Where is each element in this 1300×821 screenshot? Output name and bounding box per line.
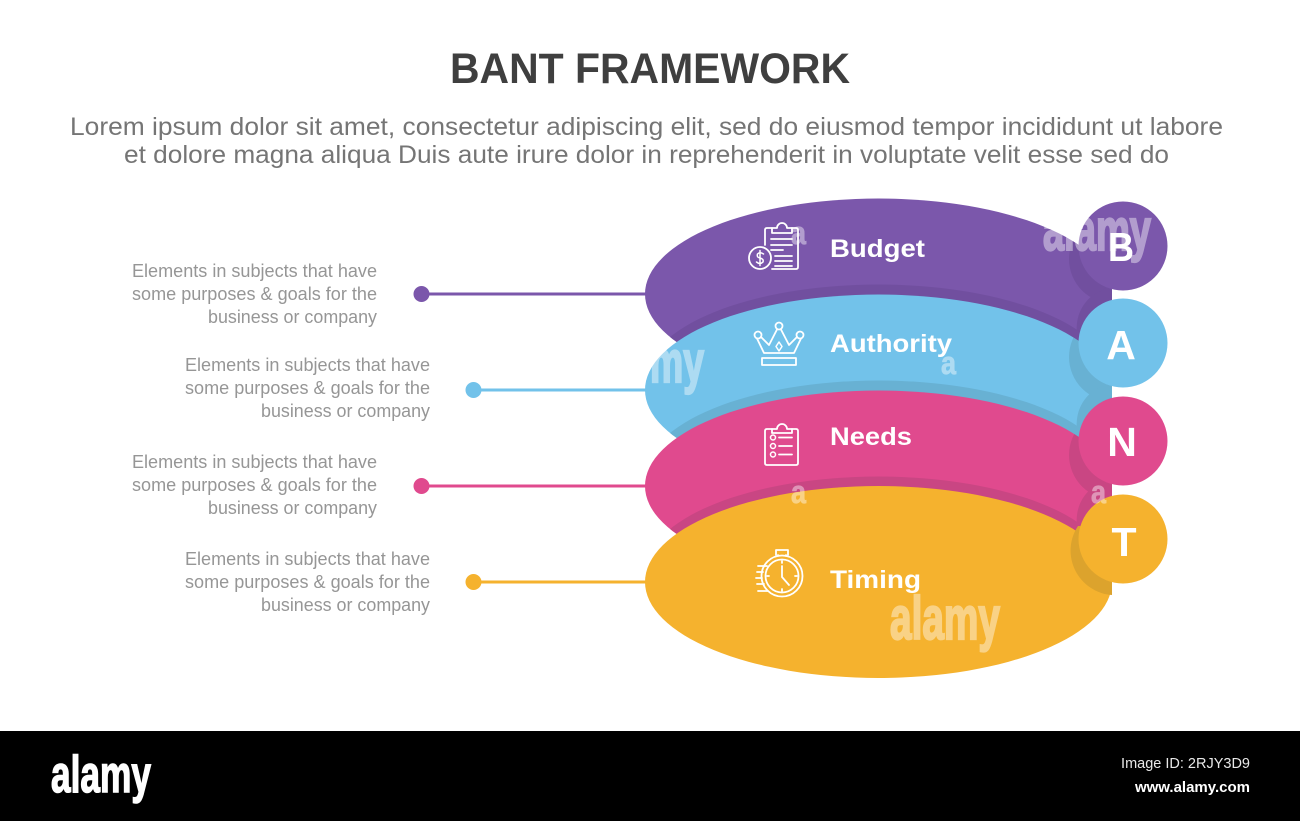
watermark overlays: my — [650, 330, 704, 395]
icon: crown — [754, 322, 804, 365]
title: BANT FRAMEWORK — [450, 45, 850, 93]
icon: budget clipboard with coin — [749, 223, 798, 269]
description: needs: Elements in subjects that have — [132, 451, 377, 472]
footer url: www.alamy.com — [1134, 779, 1250, 796]
badge: N: N — [1107, 419, 1137, 465]
description: authority: some purposes & goals for the — [185, 377, 430, 398]
description: authority: business or company — [261, 400, 431, 421]
badge: B: B — [1108, 224, 1134, 270]
watermark overlays: alamy — [1043, 198, 1151, 263]
footer image id: Image ID: 2RJY3D9 — [1121, 756, 1250, 772]
watermark overlays: a — [791, 474, 806, 510]
badge: T — [1078, 494, 1168, 584]
icon: stopwatch — [756, 550, 802, 596]
footer bar — [0, 731, 1300, 821]
icon: needs checklist — [765, 424, 798, 465]
label: Needs: Needs — [830, 423, 912, 451]
subtitle text — [70, 113, 1223, 169]
description: needs: business or company — [208, 497, 378, 518]
panel: budget ellipse — [645, 198, 1112, 342]
description: budget — [132, 260, 378, 327]
watermark overlays: a — [791, 215, 806, 251]
description: timing: some purposes & goals for the — [185, 571, 430, 592]
description: budget: Elements in subjects that have — [132, 260, 377, 281]
watermark overlays: a — [941, 345, 956, 381]
description: needs — [132, 451, 378, 518]
footer logo: alamy — [51, 746, 151, 804]
description: needs: some purposes & goals for the — [132, 474, 377, 495]
description: timing: Elements in subjects that have — [185, 548, 430, 569]
description: authority: Elements in subjects that have — [185, 354, 430, 375]
panel: needs ellipse — [645, 390, 1112, 534]
connector: timing — [466, 574, 650, 590]
label: Timing: Timing — [830, 566, 921, 594]
badge: N — [1078, 396, 1168, 486]
watermark overlays: alamy — [890, 585, 1000, 652]
subtitle text: Lorem ipsum dolor sit amet, consectetur adipiscing elit, sed do eiusmod tempor incididunt ut labore — [70, 113, 1223, 141]
description: timing: business or company — [261, 594, 431, 615]
badge: B — [1078, 202, 1168, 290]
badge: T: T — [1111, 519, 1137, 565]
label: Authority: Authority — [830, 330, 952, 358]
description: authority — [185, 354, 431, 421]
connector: authority — [466, 382, 650, 398]
badge: A — [1078, 298, 1168, 388]
panel: timing ellipse — [645, 486, 1112, 678]
connector: budget — [414, 286, 650, 302]
connector: needs — [414, 478, 650, 494]
description: budget: some purposes & goals for the — [132, 283, 377, 304]
panel: authority ellipse — [645, 294, 1112, 438]
subtitle text: et dolore magna aliqua Duis aute irure dolor in reprehenderit in voluptate velit esse sed do — [124, 141, 1169, 169]
watermark overlays — [650, 198, 1151, 652]
badge: A: A — [1106, 322, 1136, 368]
description: timing — [185, 548, 431, 615]
label: Budget: Budget — [830, 235, 926, 263]
watermark overlays: a — [1091, 474, 1106, 510]
description: budget: business or company — [208, 306, 378, 327]
